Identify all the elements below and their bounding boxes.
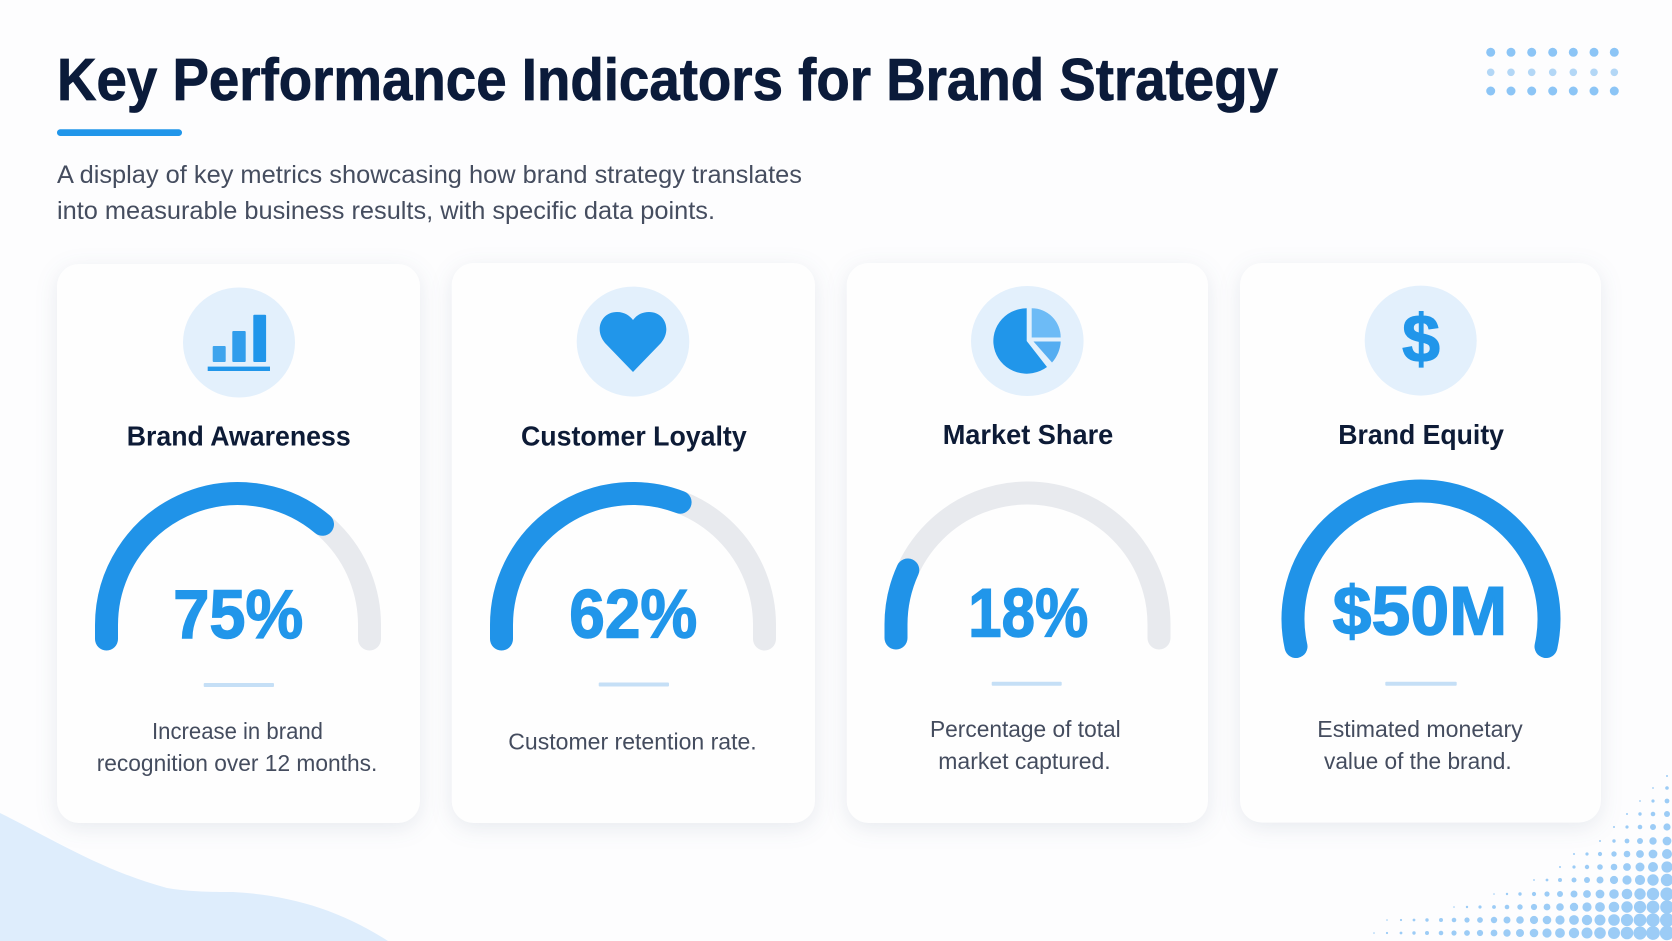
title accent underline <box>57 129 182 136</box>
value: 62% <box>569 576 697 652</box>
description: value of the brand. <box>1324 748 1512 774</box>
description <box>930 716 1121 774</box>
gauge full <box>1293 491 1549 646</box>
value: 18% <box>968 574 1088 651</box>
gauge 75% <box>106 493 370 639</box>
gauge 18% <box>896 493 1159 638</box>
panel: brand awareness <box>57 264 420 823</box>
description: Customer retention rate. <box>508 729 757 755</box>
heading: Brand Awareness <box>127 421 351 452</box>
card background <box>57 264 420 823</box>
icon: pie chart <box>971 286 1084 396</box>
card background <box>452 263 815 823</box>
title: Key Performance Indicators for Brand Strategy <box>57 47 1278 113</box>
divider <box>599 682 669 686</box>
description: recognition over 12 months. <box>97 750 377 776</box>
divider <box>992 682 1062 686</box>
description: market captured. <box>938 748 1111 774</box>
decorative wave bottom-left <box>0 813 388 941</box>
card background <box>1240 263 1601 823</box>
heading: Market Share <box>943 419 1113 450</box>
subtitle: A display of key metrics showcasing how brand strategy translates <box>57 161 802 189</box>
description: Percentage of total <box>930 716 1121 742</box>
value: $50M <box>1333 572 1507 650</box>
subtitle: into measurable business results, with specific data points. <box>57 197 715 225</box>
panel: brand equity <box>1240 263 1601 823</box>
halftone dots bottom-right <box>1373 775 1672 940</box>
icon: dollar sign: $ <box>1402 301 1440 377</box>
decorative dot grid top-right <box>1486 48 1619 96</box>
divider <box>204 683 274 687</box>
value: 75% <box>173 576 303 653</box>
heading: Customer Loyalty <box>521 421 747 452</box>
description <box>97 718 377 776</box>
heading: Brand Equity <box>1338 419 1505 450</box>
subtitle <box>57 161 802 225</box>
panel: customer loyalty <box>452 263 815 823</box>
icon: heart <box>577 287 689 397</box>
description <box>1317 716 1523 774</box>
description: Estimated monetary <box>1317 716 1523 742</box>
divider <box>1385 682 1457 686</box>
description: Increase in brand <box>152 718 323 744</box>
panel: market share <box>847 263 1208 823</box>
gauge 62% <box>501 493 764 639</box>
card background <box>847 263 1208 823</box>
icon: dollar sign <box>1365 286 1477 396</box>
icon: bar chart <box>183 288 295 398</box>
